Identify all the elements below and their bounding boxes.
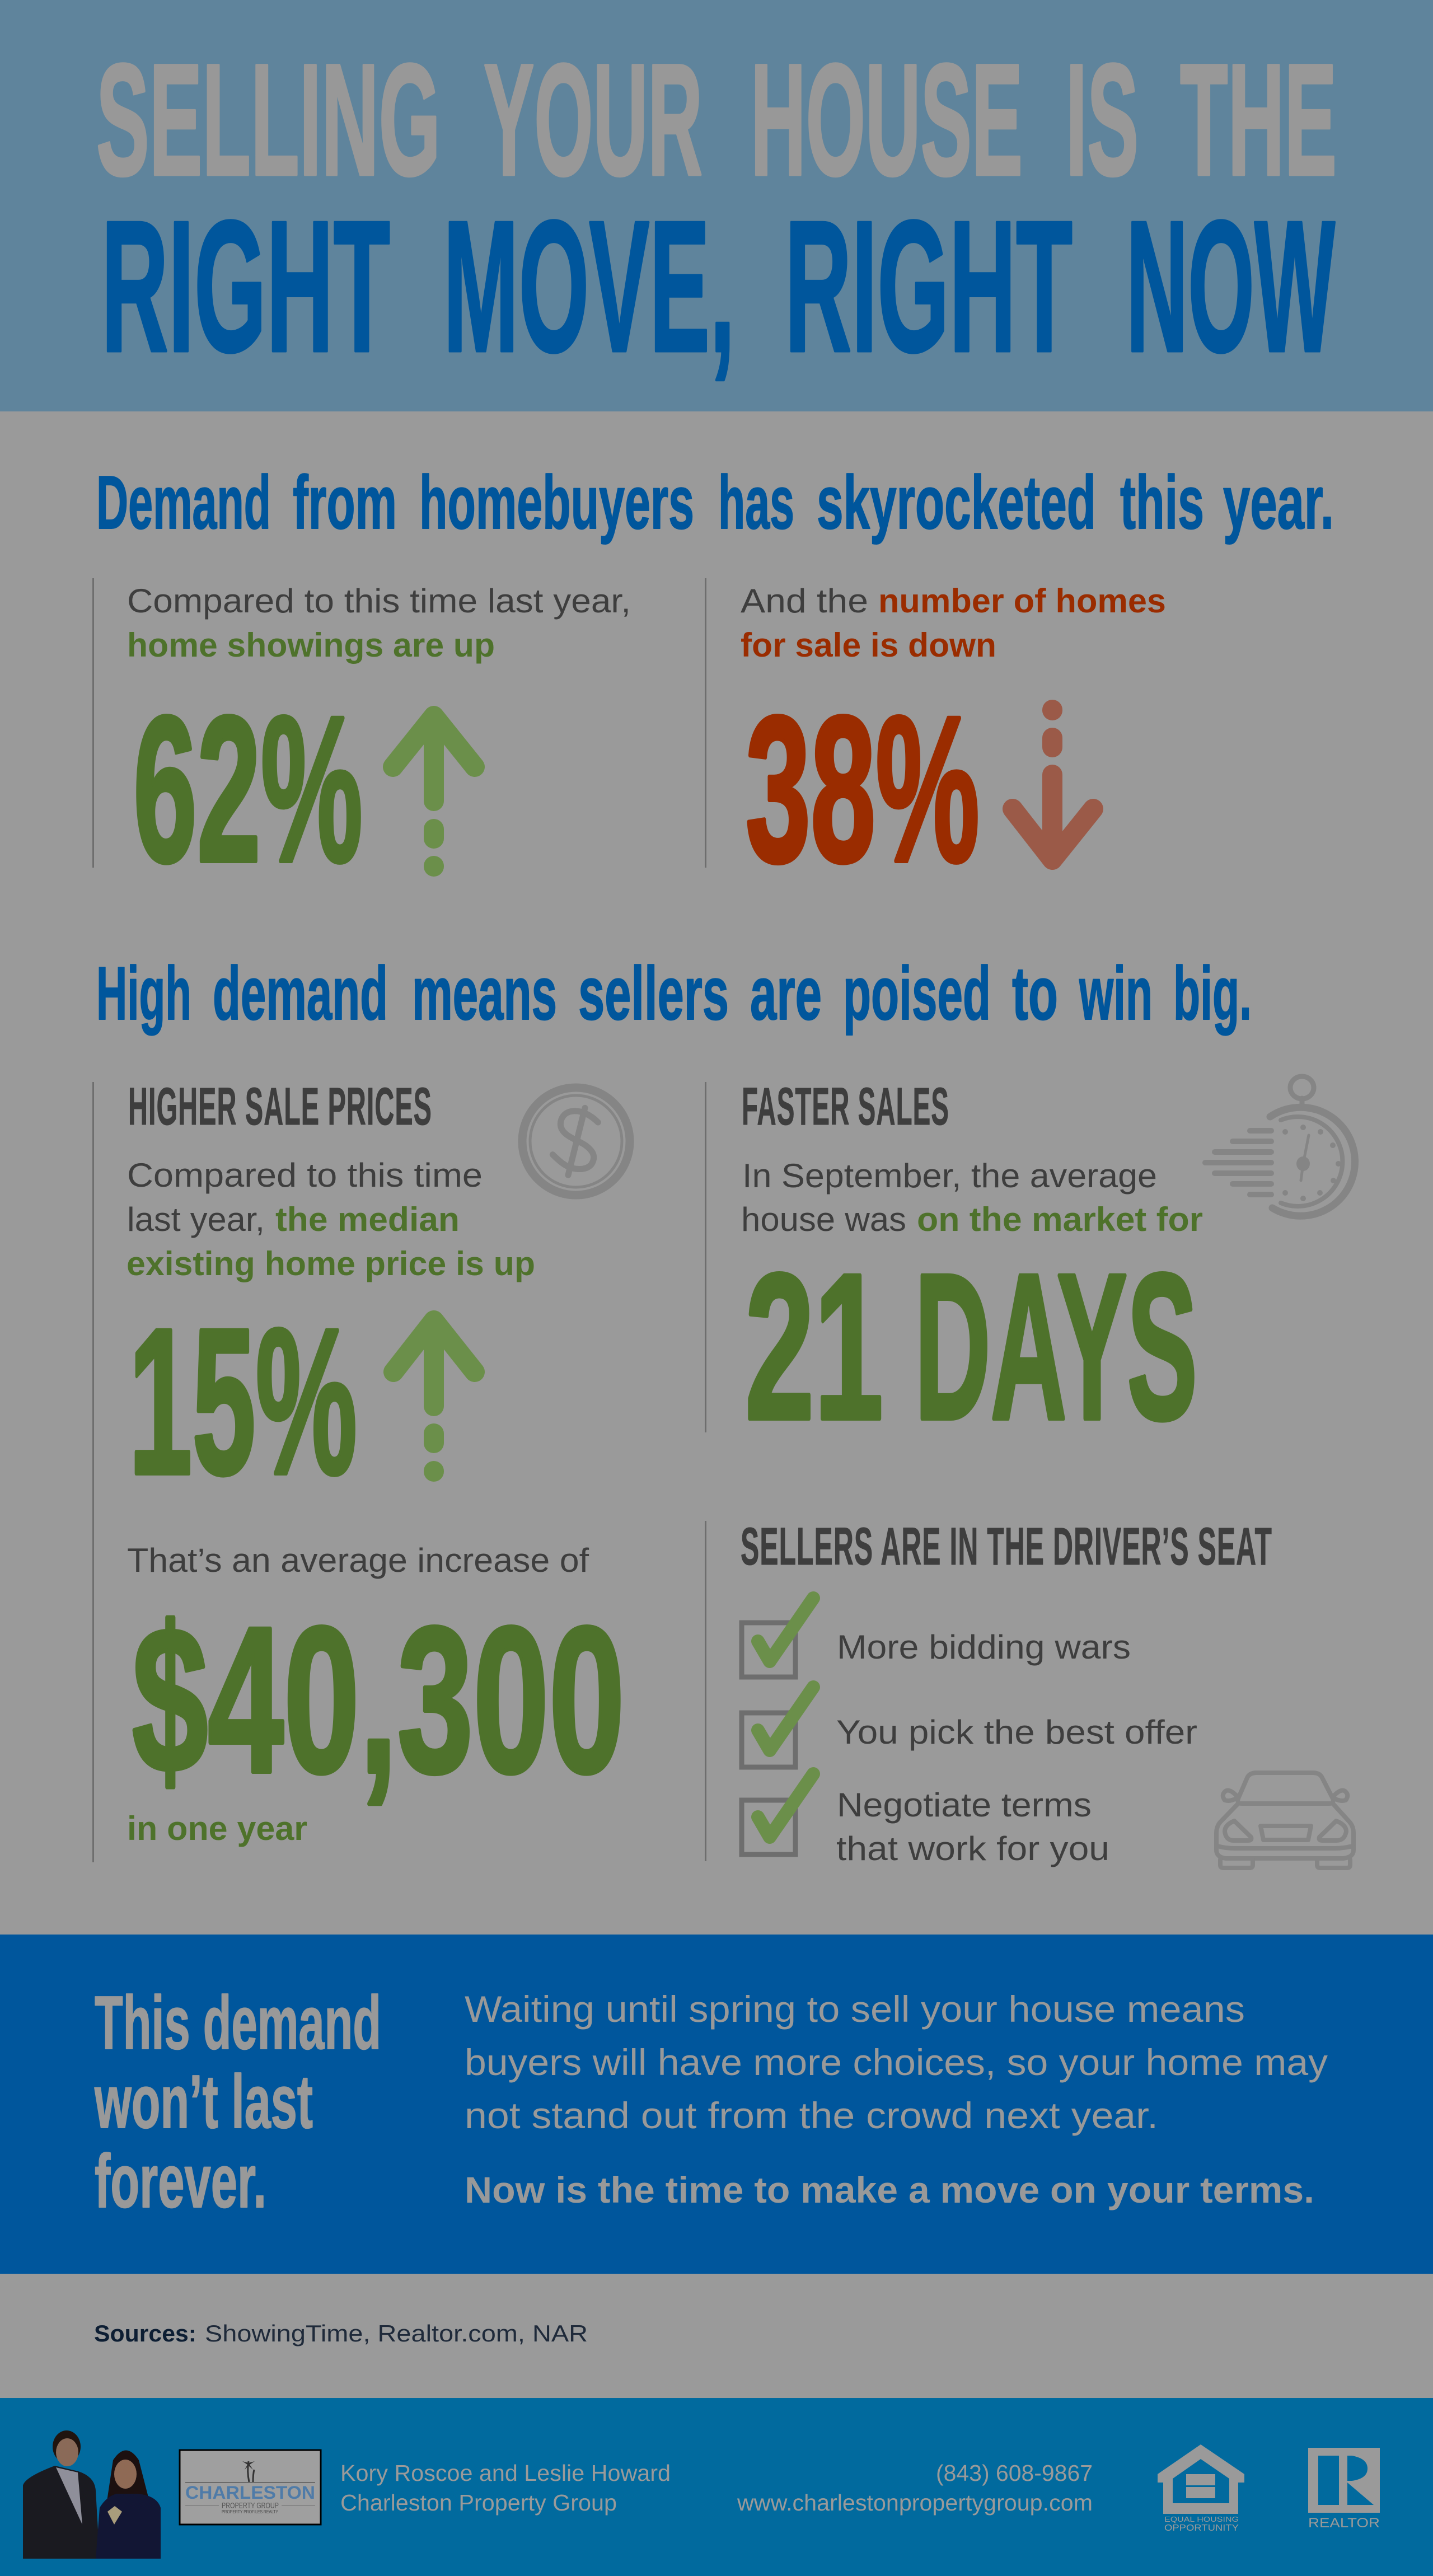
homes for sale text: number of homes xyxy=(878,582,1166,620)
stat: 15%: 15% xyxy=(129,1285,357,1518)
callout heading: forever. xyxy=(95,2139,266,2223)
title line 1 xyxy=(96,31,1337,209)
panel: faster sales xyxy=(705,1076,1355,1463)
logo: Charleston Property Group: CHARLESTON xyxy=(185,2483,315,2503)
homes for sale text xyxy=(741,582,1166,664)
panel: homes for sale down xyxy=(705,578,1166,905)
heading: high demand xyxy=(96,951,1252,1036)
panel: home showings up xyxy=(92,578,631,905)
stat: $40,300: $40,300 xyxy=(132,1584,625,1816)
agent names: Kory Roscoe and Leslie Howard xyxy=(340,2460,671,2486)
title line 1: YOUR xyxy=(484,31,703,209)
subheading: higher sale prices: HIGHER SALE PRICES xyxy=(128,1077,432,1136)
heading: demand: homebuyers xyxy=(419,460,694,545)
heading: high demand: win xyxy=(1079,951,1153,1036)
agent names: Charleston Property Group xyxy=(340,2490,617,2516)
faster sales text: In September, the average xyxy=(742,1157,1157,1195)
in one year: in one year xyxy=(127,1810,307,1847)
checklist item 3 xyxy=(742,1774,1109,1867)
stat: 38%: 38% xyxy=(746,673,980,905)
price text: the median xyxy=(275,1201,460,1238)
icon: car xyxy=(1216,1773,1354,1868)
stat: 62%: 62% xyxy=(133,673,363,905)
panel: footer xyxy=(0,2398,1433,2576)
stat: 21 days xyxy=(745,1230,1197,1463)
title line 2: MOVE, xyxy=(443,182,735,391)
callout heading: This demand xyxy=(95,1980,381,2065)
icon: up arrow xyxy=(393,716,475,867)
photo: agents xyxy=(23,2430,161,2559)
homes for sale text: for sale is down xyxy=(741,626,996,664)
price text xyxy=(127,1156,535,1282)
checklist item 3: Negotiate terms xyxy=(837,1786,1092,1824)
sources: Sources: xyxy=(94,2320,196,2346)
sources: ShowingTime, Realtor.com, NAR xyxy=(205,2320,588,2346)
checklist item 1: More bidding wars xyxy=(837,1628,1131,1666)
title line 2 xyxy=(101,182,1336,391)
heading: high demand: means xyxy=(412,951,557,1036)
checklist item 1 xyxy=(742,1598,1131,1677)
title line 2: RIGHT xyxy=(101,182,390,391)
callout paragraph: Now is the time to make a move on your terms. xyxy=(465,2169,1314,2210)
heading: demand xyxy=(96,460,1334,545)
title line 2: RIGHT xyxy=(785,182,1073,391)
subheading: faster sales: FASTER SALES xyxy=(742,1077,949,1136)
icon: realtor xyxy=(1308,2448,1380,2531)
icon: equal housing opportunity xyxy=(1158,2444,1244,2533)
sources xyxy=(94,2320,588,2346)
heading: high demand: poised xyxy=(843,951,991,1036)
homes for sale text: And the xyxy=(741,582,868,620)
panel: higher sale prices xyxy=(92,1077,630,1862)
heading: demand: from xyxy=(293,460,397,545)
title line 1: HOUSE xyxy=(751,31,1023,209)
logo: Charleston Property Group: PROPERTY PROFILES REALTY xyxy=(222,2509,279,2514)
checklist item 3: that work for you xyxy=(836,1830,1109,1867)
panel: sellers in the driver's seat xyxy=(705,1517,1354,1868)
heading: demand: has xyxy=(718,460,794,545)
heading: high demand: demand xyxy=(213,951,388,1036)
callout heading: won’t last xyxy=(94,2059,313,2144)
faster sales text: house was xyxy=(741,1201,906,1238)
heading: demand: skyrocketed xyxy=(817,460,1096,545)
logo: Charleston Property Group: PROPERTY GROUP xyxy=(222,2501,279,2511)
icon: equal housing opportunity: OPPORTUNITY xyxy=(1164,2523,1239,2533)
contact details xyxy=(737,2460,1093,2516)
checklist item 2 xyxy=(742,1687,1197,1767)
heading: high demand: to xyxy=(1012,951,1058,1036)
panel: header xyxy=(0,0,1433,411)
logo: Charleston Property Group xyxy=(180,2450,321,2525)
faster sales text xyxy=(741,1157,1203,1238)
callout heading xyxy=(94,1980,381,2223)
price text: existing home price is up xyxy=(127,1245,535,1282)
average increase text: That’s an average increase of xyxy=(127,1542,589,1579)
title line 1: IS xyxy=(1066,31,1139,209)
showings text xyxy=(127,582,631,664)
showings text: home showings are up xyxy=(127,626,495,664)
faster sales text: on the market for xyxy=(917,1201,1203,1238)
stat: 21 days: 21 xyxy=(745,1230,883,1463)
contact details: (843) 608-9867 xyxy=(936,2460,1093,2486)
contact details: www.charlestonpropertygroup.com xyxy=(737,2490,1093,2516)
icon: up arrow xyxy=(394,1320,475,1472)
icon: stopwatch xyxy=(1205,1076,1355,1216)
icon: dollar coin xyxy=(522,1088,630,1195)
agent names xyxy=(340,2460,671,2516)
heading: high demand: sellers xyxy=(578,951,729,1036)
showings text: Compared to this time last year, xyxy=(127,582,631,620)
callout paragraph: not stand out from the crowd next year. xyxy=(465,2095,1158,2136)
icon: equal housing opportunity: EQUAL HOUSING xyxy=(1164,2515,1239,2523)
callout paragraph xyxy=(465,1988,1328,2210)
heading: demand: year. xyxy=(1223,460,1334,545)
callout paragraph: buyers will have more choices, so your home may xyxy=(465,2041,1328,2083)
heading: demand: Demand xyxy=(96,460,271,545)
price text: Compared to this time xyxy=(127,1156,483,1194)
checklist item 2: You pick the best offer xyxy=(836,1713,1197,1751)
panel: call to action band xyxy=(0,1935,1433,2274)
title line 1: SELLING xyxy=(96,31,441,209)
icon: down arrow xyxy=(1013,710,1093,860)
callout paragraph: Waiting until spring to sell your house means xyxy=(465,1988,1245,2030)
heading: high demand: High xyxy=(96,951,191,1036)
price text: last year, xyxy=(127,1201,265,1238)
heading: high demand: big. xyxy=(1173,951,1252,1036)
heading: demand: this xyxy=(1120,460,1204,545)
heading: high demand: are xyxy=(750,951,822,1036)
icon: realtor: REALTOR xyxy=(1308,2516,1380,2531)
